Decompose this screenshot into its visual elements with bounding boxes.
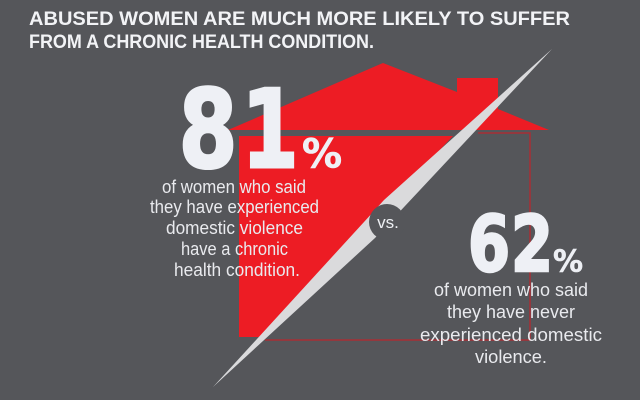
text: 62% description: of women who said <box>434 280 588 300</box>
statistic: 62%: 6 <box>468 200 510 290</box>
title: FROM A CHRONIC HEALTH CONDITION. <box>29 31 374 53</box>
statistic: 81%: % <box>302 132 342 178</box>
text: 81% description <box>150 177 319 280</box>
vs badge <box>369 204 405 240</box>
house body, filled half <box>239 136 453 337</box>
statistic: 62%: % <box>553 244 583 280</box>
text: 81% description: domestic violence <box>166 218 303 238</box>
house body outline, empty half <box>265 133 530 340</box>
statistic: 62%: 2 <box>511 200 553 290</box>
text: 81% description: of women who said <box>162 177 306 197</box>
statistic: 81%: 1 <box>241 67 299 193</box>
house illustration <box>228 63 549 340</box>
title: ABUSED WOMEN ARE MUCH MORE LIKELY TO SUFFER <box>29 8 570 30</box>
text: 62% description: they have never <box>447 302 575 322</box>
vs badge: vs. <box>377 213 399 232</box>
text: 62% description: violence. <box>475 347 547 367</box>
statistic: 81%: 8 <box>179 67 237 193</box>
diagonal divider <box>213 49 552 387</box>
text: 62% description: experienced domestic <box>420 325 602 345</box>
text: 81% description: health condition. <box>174 260 300 280</box>
text: 62% description <box>420 280 602 367</box>
text: 81% description: have a chronic <box>181 239 288 259</box>
house roof <box>228 63 549 130</box>
title <box>29 8 570 53</box>
statistic: 81% <box>179 67 342 193</box>
statistic: 62% <box>468 200 583 290</box>
text: 81% description: they have experienced <box>150 197 319 217</box>
